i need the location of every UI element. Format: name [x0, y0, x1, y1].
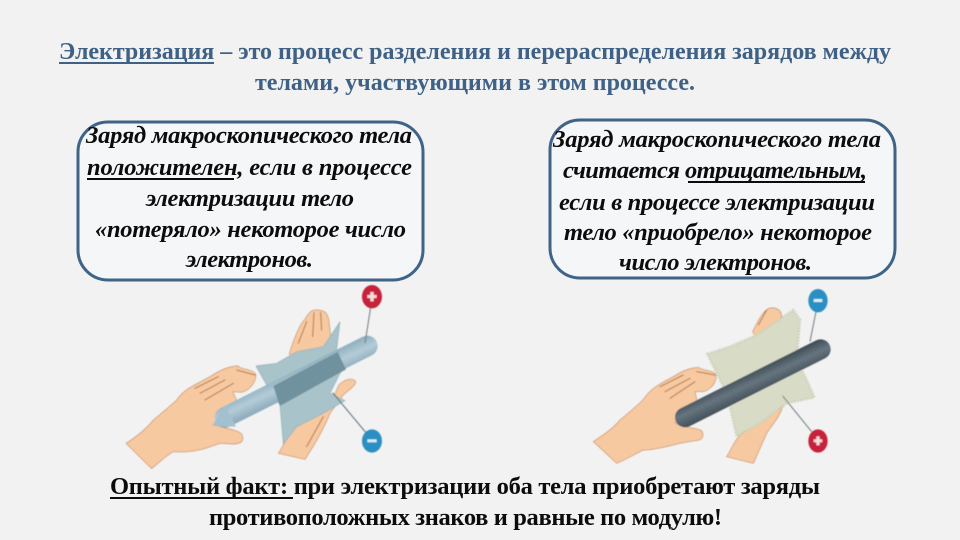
right panel text: тело «приобрело» некоторое	[564, 219, 872, 246]
silk cloth	[256, 322, 347, 444]
right panel text	[552, 126, 881, 276]
back hand	[727, 308, 783, 463]
wool cloth	[707, 310, 814, 436]
negative marker	[333, 393, 382, 453]
front hand	[126, 366, 256, 469]
experimental fact text: противоположных знаков и равные по модулю!	[209, 504, 722, 531]
positive marker	[783, 396, 828, 453]
panel: positive charge definition	[78, 122, 423, 280]
right panel frame	[550, 120, 895, 278]
panel: negative charge definition	[550, 120, 895, 278]
right panel text: если в процессе электризации	[559, 189, 875, 216]
right panel text: число электронов.	[619, 249, 812, 276]
experimental fact text: Опытный факт: при электризации оба тела приобретают заряды	[110, 473, 820, 500]
title: Электризация – это процесс разделения и перераспределения зарядов между	[59, 39, 891, 65]
back hand	[278, 310, 356, 459]
cloth wrap over rod	[273, 352, 346, 406]
left panel text: Заряд макроскопического тела	[85, 122, 412, 149]
left panel text: электронов.	[185, 246, 313, 273]
title	[59, 39, 891, 96]
left panel text: «потеряло» некоторое число	[95, 216, 406, 243]
left panel text: положителен, если в процессе	[87, 154, 412, 181]
ebonite rod	[685, 349, 821, 417]
illustration: ebonite rod rubbed with wool	[593, 289, 828, 463]
right panel text: Заряд макроскопического тела	[552, 126, 881, 153]
front hand	[593, 368, 716, 463]
experimental fact text	[110, 473, 820, 531]
glass rod	[212, 346, 367, 427]
positive marker	[362, 285, 382, 343]
left panel text: электризации тело	[145, 185, 354, 212]
right panel text: считается отрицательным,	[563, 157, 867, 184]
left panel frame	[78, 122, 423, 280]
illustration: glass rod rubbed with silk	[126, 285, 382, 469]
left panel text	[85, 122, 412, 273]
negative marker	[808, 289, 828, 342]
title: телами, участвующими в этом процессе.	[255, 70, 695, 96]
